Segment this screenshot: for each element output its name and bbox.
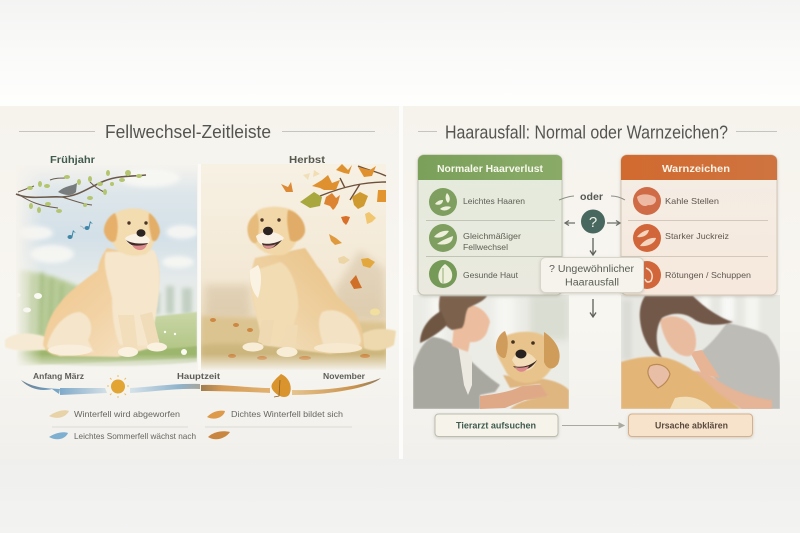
heading: Haarausfall: Normal oder Warnzeichen?: Haarausfall: Normal oder Warnzeichen? <box>445 122 728 142</box>
arrow: callout down <box>590 299 596 317</box>
autumn arrow left segment <box>201 385 270 393</box>
item: Leichtes Haaren: Leichtes Haaren <box>463 196 525 206</box>
item: Starker Juckreiz: Starker Juckreiz <box>665 231 729 241</box>
panel gap <box>399 106 403 459</box>
photo: woman inspecting bald patch <box>621 295 780 409</box>
legend icon: brown leaf <box>208 431 230 439</box>
callout: Ungewöhnlicher Haarausfall: Haarausfall <box>565 278 619 288</box>
button: Tierarzt aufsuchen <box>435 414 558 436</box>
illustration: spring golden retriever <box>5 208 167 357</box>
illustration: autumn golden retriever <box>242 207 396 357</box>
card header: Warnzeichen: Warnzeichen <box>662 163 730 175</box>
button: Ursache abklären: Ursache abklären <box>655 420 728 430</box>
callout: Ungewöhnlicher Haarausfall: ? Ungewöhnlicher <box>549 264 635 275</box>
icon: branch with bird <box>16 170 146 213</box>
item: Gleichmäßiger Fellwechsel: Fellwechsel <box>463 242 508 252</box>
timeline label: November: November <box>323 371 366 381</box>
card header: Normaler Haarverlust <box>418 155 562 180</box>
icon: autumn leaf <box>271 374 291 397</box>
timeline label: Anfang März: Anfang März <box>33 371 84 381</box>
legend item: Winterfell wird abgeworfen: Winterfell wird abgeworfen <box>74 409 180 419</box>
arrow: question down <box>590 238 596 255</box>
panel: Fellwechsel-Zeitleiste <box>0 106 399 459</box>
card header: Warnzeichen <box>621 155 777 180</box>
illustration: autumn dog scene <box>201 164 391 372</box>
icon: question mark <box>581 210 605 234</box>
item: Rötungen / Schuppen: Rötungen / Schuppen <box>665 270 751 280</box>
item: Kahle Stellen: Kahle Stellen <box>665 196 719 206</box>
card: Warnzeichen <box>621 155 777 295</box>
label: Frühjahr: Frühjahr <box>50 154 95 166</box>
spring arrow <box>21 380 107 395</box>
panel: Haarausfall <box>403 106 800 459</box>
legend <box>49 409 352 441</box>
label: oder with connectors <box>559 192 625 203</box>
icon: question mark: ? <box>589 214 597 231</box>
item: Starker Juckreiz <box>633 224 729 252</box>
arrow: question to warning <box>607 220 620 226</box>
callout: Ungewöhnlicher Haarausfall <box>540 258 644 292</box>
card: Normaler Haarverlust <box>418 155 562 295</box>
heading: Fellwechsel-Zeitleiste: Fellwechsel-Zeitleiste <box>105 122 271 142</box>
label: Herbst: Herbst <box>289 154 326 166</box>
item: Kahle Stellen <box>633 187 719 215</box>
item: Leichtes Haaren <box>429 188 525 216</box>
autumn arrow right segment <box>292 378 381 395</box>
illustration: spring dog scene <box>17 172 197 366</box>
legend item: Dichtes Winterfell bildet sich: Dichtes Winterfell bildet sich <box>231 409 343 419</box>
label: oder with connectors: oder <box>580 192 603 203</box>
card header: Normaler Haarverlust: Normaler Haarverlust <box>437 164 544 175</box>
spring arrow right segment <box>130 384 200 393</box>
timeline arrow <box>21 371 381 398</box>
timeline label: Hauptzeit: Hauptzeit <box>177 371 220 381</box>
item: Gesunde Haut: Gesunde Haut <box>463 270 519 280</box>
item: Rötungen / Schuppen <box>633 261 751 289</box>
icon: autumn branch with leaves <box>281 164 386 289</box>
item: Gleichmäßiger Fellwechsel <box>429 224 521 252</box>
divider between seasons <box>198 164 201 370</box>
item: Gleichmäßiger Fellwechsel: Gleichmäßiger <box>463 231 521 241</box>
button: Ursache abklären <box>628 414 752 436</box>
legend item: Leichtes Sommerfell wächst nach: Leichtes Sommerfell wächst nach <box>74 431 196 441</box>
arrow: question to normal <box>565 220 575 226</box>
item: Gesunde Haut <box>429 260 519 288</box>
photo: woman with dog <box>413 295 569 409</box>
button: Tierarzt aufsuchen: Tierarzt aufsuchen <box>456 420 536 430</box>
icon: sun <box>107 375 129 398</box>
icon: music notes <box>68 221 93 239</box>
arrow: to Ursache abklären <box>562 423 624 428</box>
